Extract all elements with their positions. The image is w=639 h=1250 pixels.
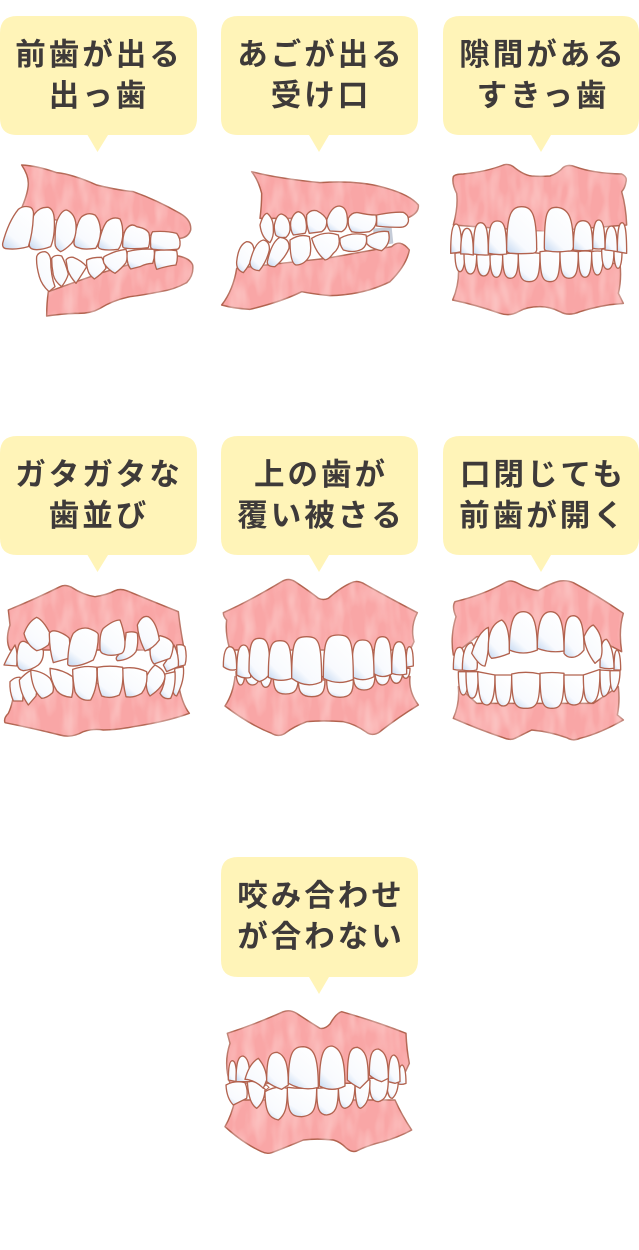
callout: 前歯が出る 出っ歯 <box>0 16 197 152</box>
upper teeth <box>451 207 627 255</box>
upper gum <box>223 579 417 650</box>
upper gum <box>227 1011 409 1083</box>
callout: あごが出る 受け口: 受け口 <box>271 79 371 113</box>
upper teeth <box>223 635 413 685</box>
callout: 咬み合わせ が合わない: が合わない <box>237 919 405 954</box>
illustration: crowded teeth <box>4 585 189 736</box>
callout: ガタガタな 歯並び: ガタガタな <box>15 458 183 492</box>
gap diamond <box>263 1085 269 1090</box>
upper teeth <box>260 206 408 243</box>
lower gum <box>222 243 409 309</box>
callout: 前歯が出る 出っ歯: 前歯が出る <box>15 37 183 72</box>
callout: ガタガタな 歯並び <box>0 436 197 572</box>
illustration: open bite <box>452 581 623 740</box>
lower gum <box>225 1100 412 1153</box>
upper teeth <box>228 1046 406 1089</box>
callout: 隙間がある すきっ歯: すきっ歯 <box>477 79 609 113</box>
upper teeth <box>4 616 186 672</box>
callout: 上の歯が 覆い被さる <box>221 436 418 572</box>
upper gum <box>252 172 418 218</box>
callout: 隙間がある すきっ歯 <box>443 16 639 152</box>
lower gum <box>5 683 189 736</box>
upper gum <box>453 164 627 232</box>
callout: 口閉じても 前歯が開く: 口閉じても <box>460 458 626 492</box>
lower teeth <box>226 1078 398 1120</box>
callout: 咬み合わせ が合わない <box>221 857 418 994</box>
lower teeth <box>236 668 410 697</box>
upper teeth <box>453 612 621 671</box>
upper gum <box>20 165 191 238</box>
callout: 口閉じても 前歯が開く: 前歯が開く <box>459 498 627 533</box>
callout: 隙間がある すきっ歯: 隙間がある <box>459 37 627 72</box>
upper gum <box>7 585 183 650</box>
upper teeth <box>3 207 180 252</box>
callout: 上の歯が 覆い被さる: 覆い被さる <box>237 499 405 533</box>
callout: 口閉じても 前歯が開く <box>443 436 639 572</box>
lower teeth <box>455 249 622 282</box>
illustration: crossbite <box>225 1011 412 1153</box>
illustration: underbite <box>222 172 418 309</box>
lower gum <box>225 677 418 735</box>
illustration: deep overbite <box>223 579 418 735</box>
lower teeth <box>37 249 177 292</box>
callout: 咬み合わせ が合わない: 咬み合わせ <box>237 879 405 913</box>
lower gum <box>453 687 623 740</box>
upper gum <box>452 581 623 655</box>
callout: ガタガタな 歯並び: 歯並び <box>49 499 149 533</box>
callout: あごが出る 受け口 <box>221 16 418 152</box>
gap between upper teeth <box>537 231 545 251</box>
lower teeth <box>237 231 389 273</box>
lower teeth <box>10 665 184 705</box>
callout: 前歯が出る 出っ歯: 出っ歯 <box>49 79 149 113</box>
callout: あごが出る 受け口: あごが出る <box>237 37 405 72</box>
illustration: gapped teeth <box>451 164 627 315</box>
lower gum <box>453 263 623 315</box>
shadow between teeth <box>373 227 393 247</box>
callout: 上の歯が 覆い被さる: 上の歯が <box>254 457 388 492</box>
lower teeth <box>458 669 620 708</box>
illustration: protruding front teeth <box>3 165 193 316</box>
lower gum <box>47 256 193 316</box>
